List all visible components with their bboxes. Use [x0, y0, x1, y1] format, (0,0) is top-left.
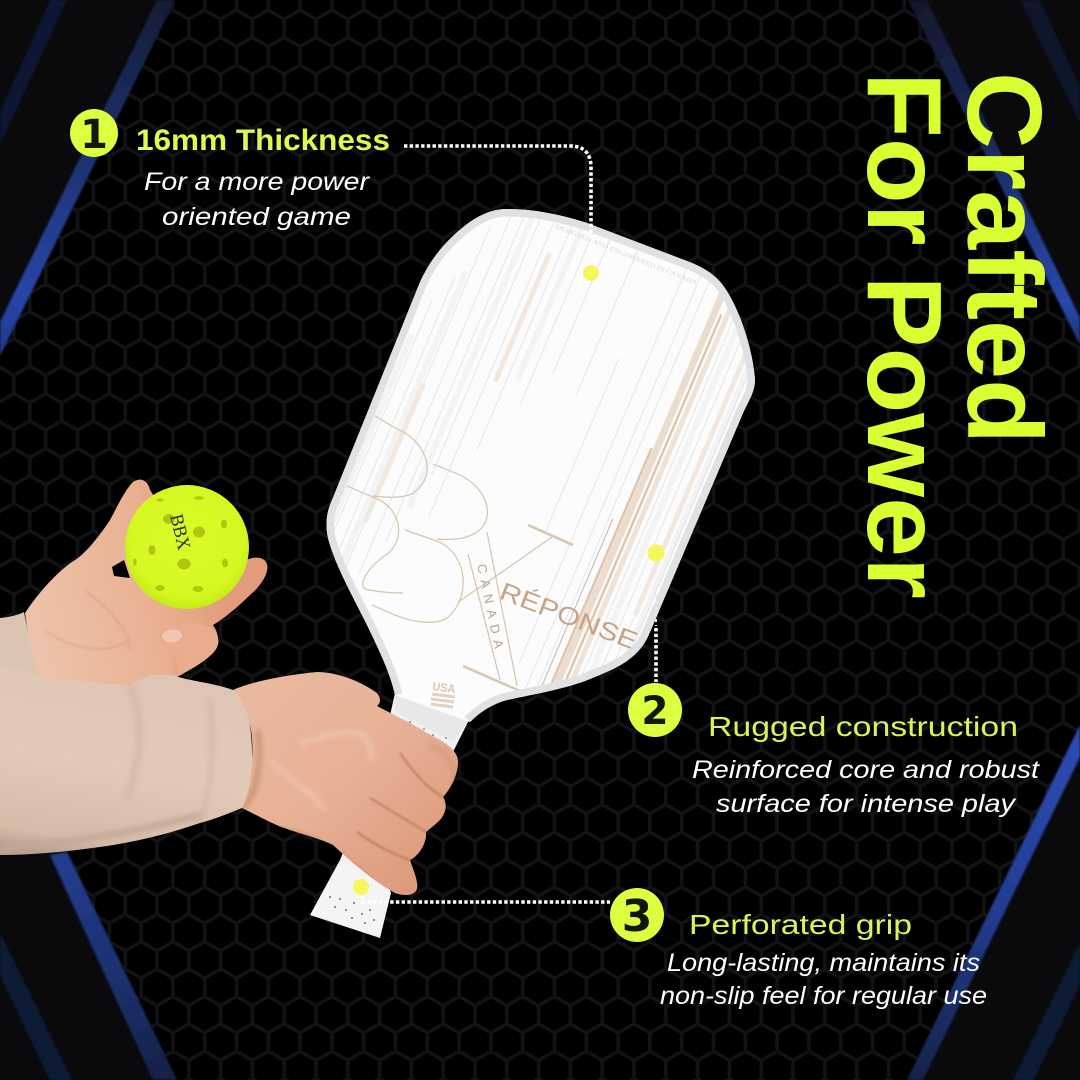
- callout line 2: [655, 565, 657, 682]
- corner: top left: [0, 0, 175, 356]
- title: crafted for power: Crafted: [945, 72, 1063, 444]
- description 1: For a more power: [144, 168, 371, 196]
- callout line 3: [362, 896, 610, 902]
- heading 1: 16mm Thickness: [136, 124, 390, 157]
- pickleball: [125, 485, 249, 609]
- marker dot 1: [583, 265, 599, 281]
- logo wordmark: reponse: RÉPONSE: [496, 577, 642, 656]
- description 3: Long-lasting, maintains its: [667, 949, 980, 977]
- feature 3: perforated grip: [610, 888, 987, 1010]
- ball holes: [133, 496, 228, 592]
- usa badge: USA: [432, 679, 457, 696]
- gap between fingers: [112, 560, 130, 578]
- ball logo: BBX: [165, 512, 194, 552]
- number badge 1: [70, 109, 118, 158]
- sleeve folds: [60, 688, 214, 843]
- paddle: [287, 142, 800, 938]
- right hand gripping paddle: [233, 672, 458, 895]
- number badge 2: [628, 683, 682, 737]
- title: crafted for power: For Power: [845, 72, 963, 599]
- heading 2: Rugged construction: [708, 711, 1018, 742]
- number badge 1: 1: [80, 112, 108, 158]
- marker dot 2: [648, 544, 664, 562]
- thumbnail: [161, 628, 183, 644]
- logo monogram: [347, 416, 573, 691]
- corner: bottom left: [0, 712, 177, 1080]
- top small text: DESIGNED AND ENGINEERED IN CANADA: [554, 223, 698, 287]
- description 2: surface for intense play: [716, 790, 1017, 818]
- corner: top right: [908, 0, 1080, 345]
- logo small text: canada: CANADA: [474, 563, 507, 650]
- description 2: Reinforced core and robust: [692, 756, 1040, 784]
- front sleeve: [0, 665, 252, 855]
- description 3: non-slip feel for regular use: [660, 982, 987, 1010]
- feature 2: rugged construction: [628, 683, 1040, 818]
- thumb shape: [160, 623, 218, 676]
- callout line 1: [404, 146, 591, 266]
- description 1: oriented game: [162, 203, 351, 231]
- paddle handle: [310, 693, 470, 938]
- paddle face: [326, 209, 755, 722]
- left hand: [25, 480, 267, 695]
- marker dot 3: [353, 879, 369, 895]
- finger creases and veins: [240, 730, 454, 880]
- description 3: [660, 949, 987, 1010]
- number badge 2: 2: [641, 689, 669, 734]
- feature 1: 16mm thickness: [70, 109, 390, 231]
- face streak lines: [326, 209, 755, 697]
- description 1: [144, 168, 371, 231]
- number badge 3: [610, 888, 664, 942]
- corner: bottom right: [907, 725, 1080, 1080]
- description 2: [692, 756, 1040, 818]
- paddle rim: [326, 209, 755, 722]
- heading 3: Perforated grip: [689, 909, 912, 940]
- title: crafted for power: [845, 72, 1063, 599]
- number badge 3: 3: [622, 891, 652, 942]
- palm creases: [45, 590, 176, 675]
- back sleeve: [0, 612, 44, 690]
- usa badge: [431, 679, 457, 707]
